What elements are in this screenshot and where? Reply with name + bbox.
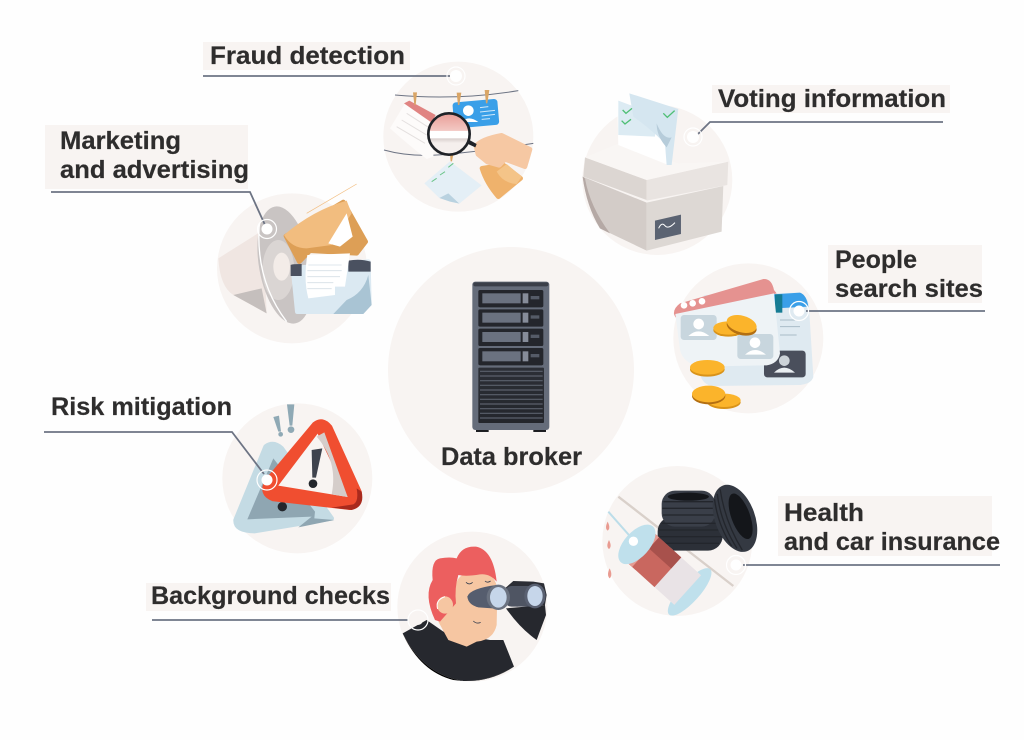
heading: search sites (835, 275, 983, 303)
heading: Risk mitigation (51, 393, 232, 421)
node marker (684, 128, 702, 146)
label background (203, 42, 410, 70)
connector (152, 619, 408, 621)
panel: background checks (146, 532, 547, 682)
node marker (447, 67, 465, 85)
label background (778, 496, 992, 556)
illustration: magnifier over clothesline (383, 62, 533, 212)
node marker (257, 470, 277, 490)
heading: Voting information (718, 85, 946, 113)
connector (697, 122, 943, 135)
hub circle (388, 247, 634, 493)
icon: server tower (472, 282, 549, 432)
node marker (726, 556, 746, 574)
node marker (790, 302, 808, 320)
panel: people search sites (673, 245, 985, 413)
label background (828, 245, 982, 303)
panel: health and car insurance (602, 466, 1000, 621)
connector (743, 564, 1000, 566)
heading: Fraud detection (210, 42, 405, 70)
panel: fraud detection (203, 42, 533, 212)
label background (45, 125, 248, 189)
connector (51, 192, 265, 225)
illustration: warning triangles (222, 403, 372, 553)
panel: risk mitigation (44, 393, 372, 553)
node marker (258, 220, 276, 238)
illustration: ballot box (582, 93, 732, 255)
illustration: man with binoculars (397, 532, 547, 682)
panel: data broker hub (388, 247, 634, 493)
illustration: syringe and tires (602, 466, 766, 621)
label background (712, 85, 950, 113)
connector (203, 75, 450, 77)
heading: Health (784, 499, 864, 527)
illustration: browser windows and coins (673, 263, 823, 413)
label background (146, 583, 391, 611)
heading: People (835, 246, 917, 274)
node marker (408, 610, 428, 630)
heading: Background checks (151, 582, 390, 610)
connector (806, 310, 985, 312)
heading: and car insurance (784, 528, 1000, 556)
connector (44, 432, 264, 474)
heading: Marketing (60, 127, 181, 155)
illustration: megaphone and envelope (217, 184, 372, 343)
panel: voting information (582, 85, 950, 255)
heading: and advertising (60, 156, 249, 184)
hub label: Data broker (441, 443, 582, 471)
panel: marketing and advertising (45, 125, 372, 343)
